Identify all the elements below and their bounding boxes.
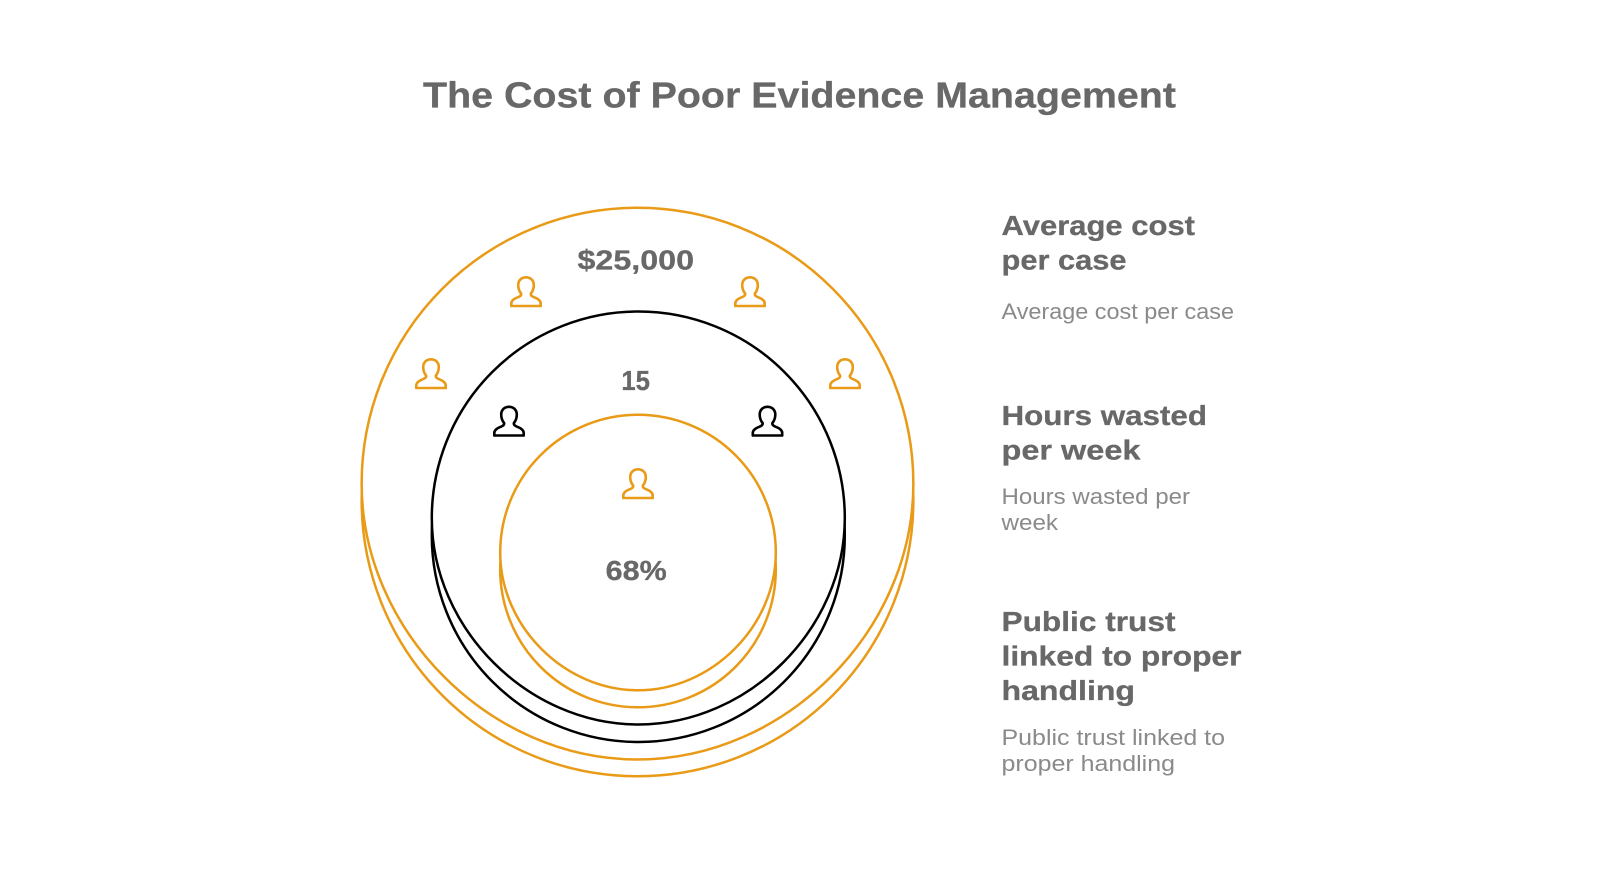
heading: per week	[1002, 434, 1141, 465]
icon: person orange right	[830, 359, 860, 388]
icon: person orange top left	[511, 277, 541, 306]
heading: Average cost	[1002, 210, 1195, 241]
description: proper handling	[1002, 751, 1175, 776]
heading: handling	[1002, 675, 1135, 706]
middle ring: hours wasted per week	[432, 312, 845, 742]
title: The Cost of Poor Evidence Management	[423, 74, 1176, 116]
label: average cost per case	[1002, 210, 1234, 324]
icon: person orange top right	[735, 277, 765, 306]
heading	[1002, 400, 1207, 465]
description: Public trust linked to	[1002, 725, 1225, 750]
value: 68%: 68%	[606, 555, 667, 586]
heading	[1002, 606, 1242, 706]
icon: person black left	[494, 407, 524, 436]
icon: person black right	[753, 407, 782, 436]
description: week	[1000, 510, 1059, 535]
heading: linked to proper	[1002, 640, 1242, 672]
description: Hours wasted per	[1002, 484, 1190, 509]
label: public trust	[1002, 606, 1242, 776]
icon: person orange left	[416, 359, 446, 388]
description: Average cost per case	[1002, 299, 1234, 324]
label: hours wasted per week	[1000, 400, 1207, 535]
heading: Public trust	[1002, 606, 1176, 637]
heading: Hours wasted	[1002, 400, 1207, 431]
description	[1002, 725, 1225, 776]
concentric circle diagram	[362, 208, 913, 776]
description	[1000, 484, 1190, 535]
heading	[1002, 210, 1195, 275]
outer ring: average cost per case	[362, 208, 913, 776]
value: $25,000: $25,000	[578, 244, 694, 276]
inner ring: public trust	[500, 415, 776, 707]
heading: per case	[1002, 244, 1126, 275]
value: 15: 15	[621, 365, 650, 396]
icon: person orange center	[623, 469, 653, 498]
